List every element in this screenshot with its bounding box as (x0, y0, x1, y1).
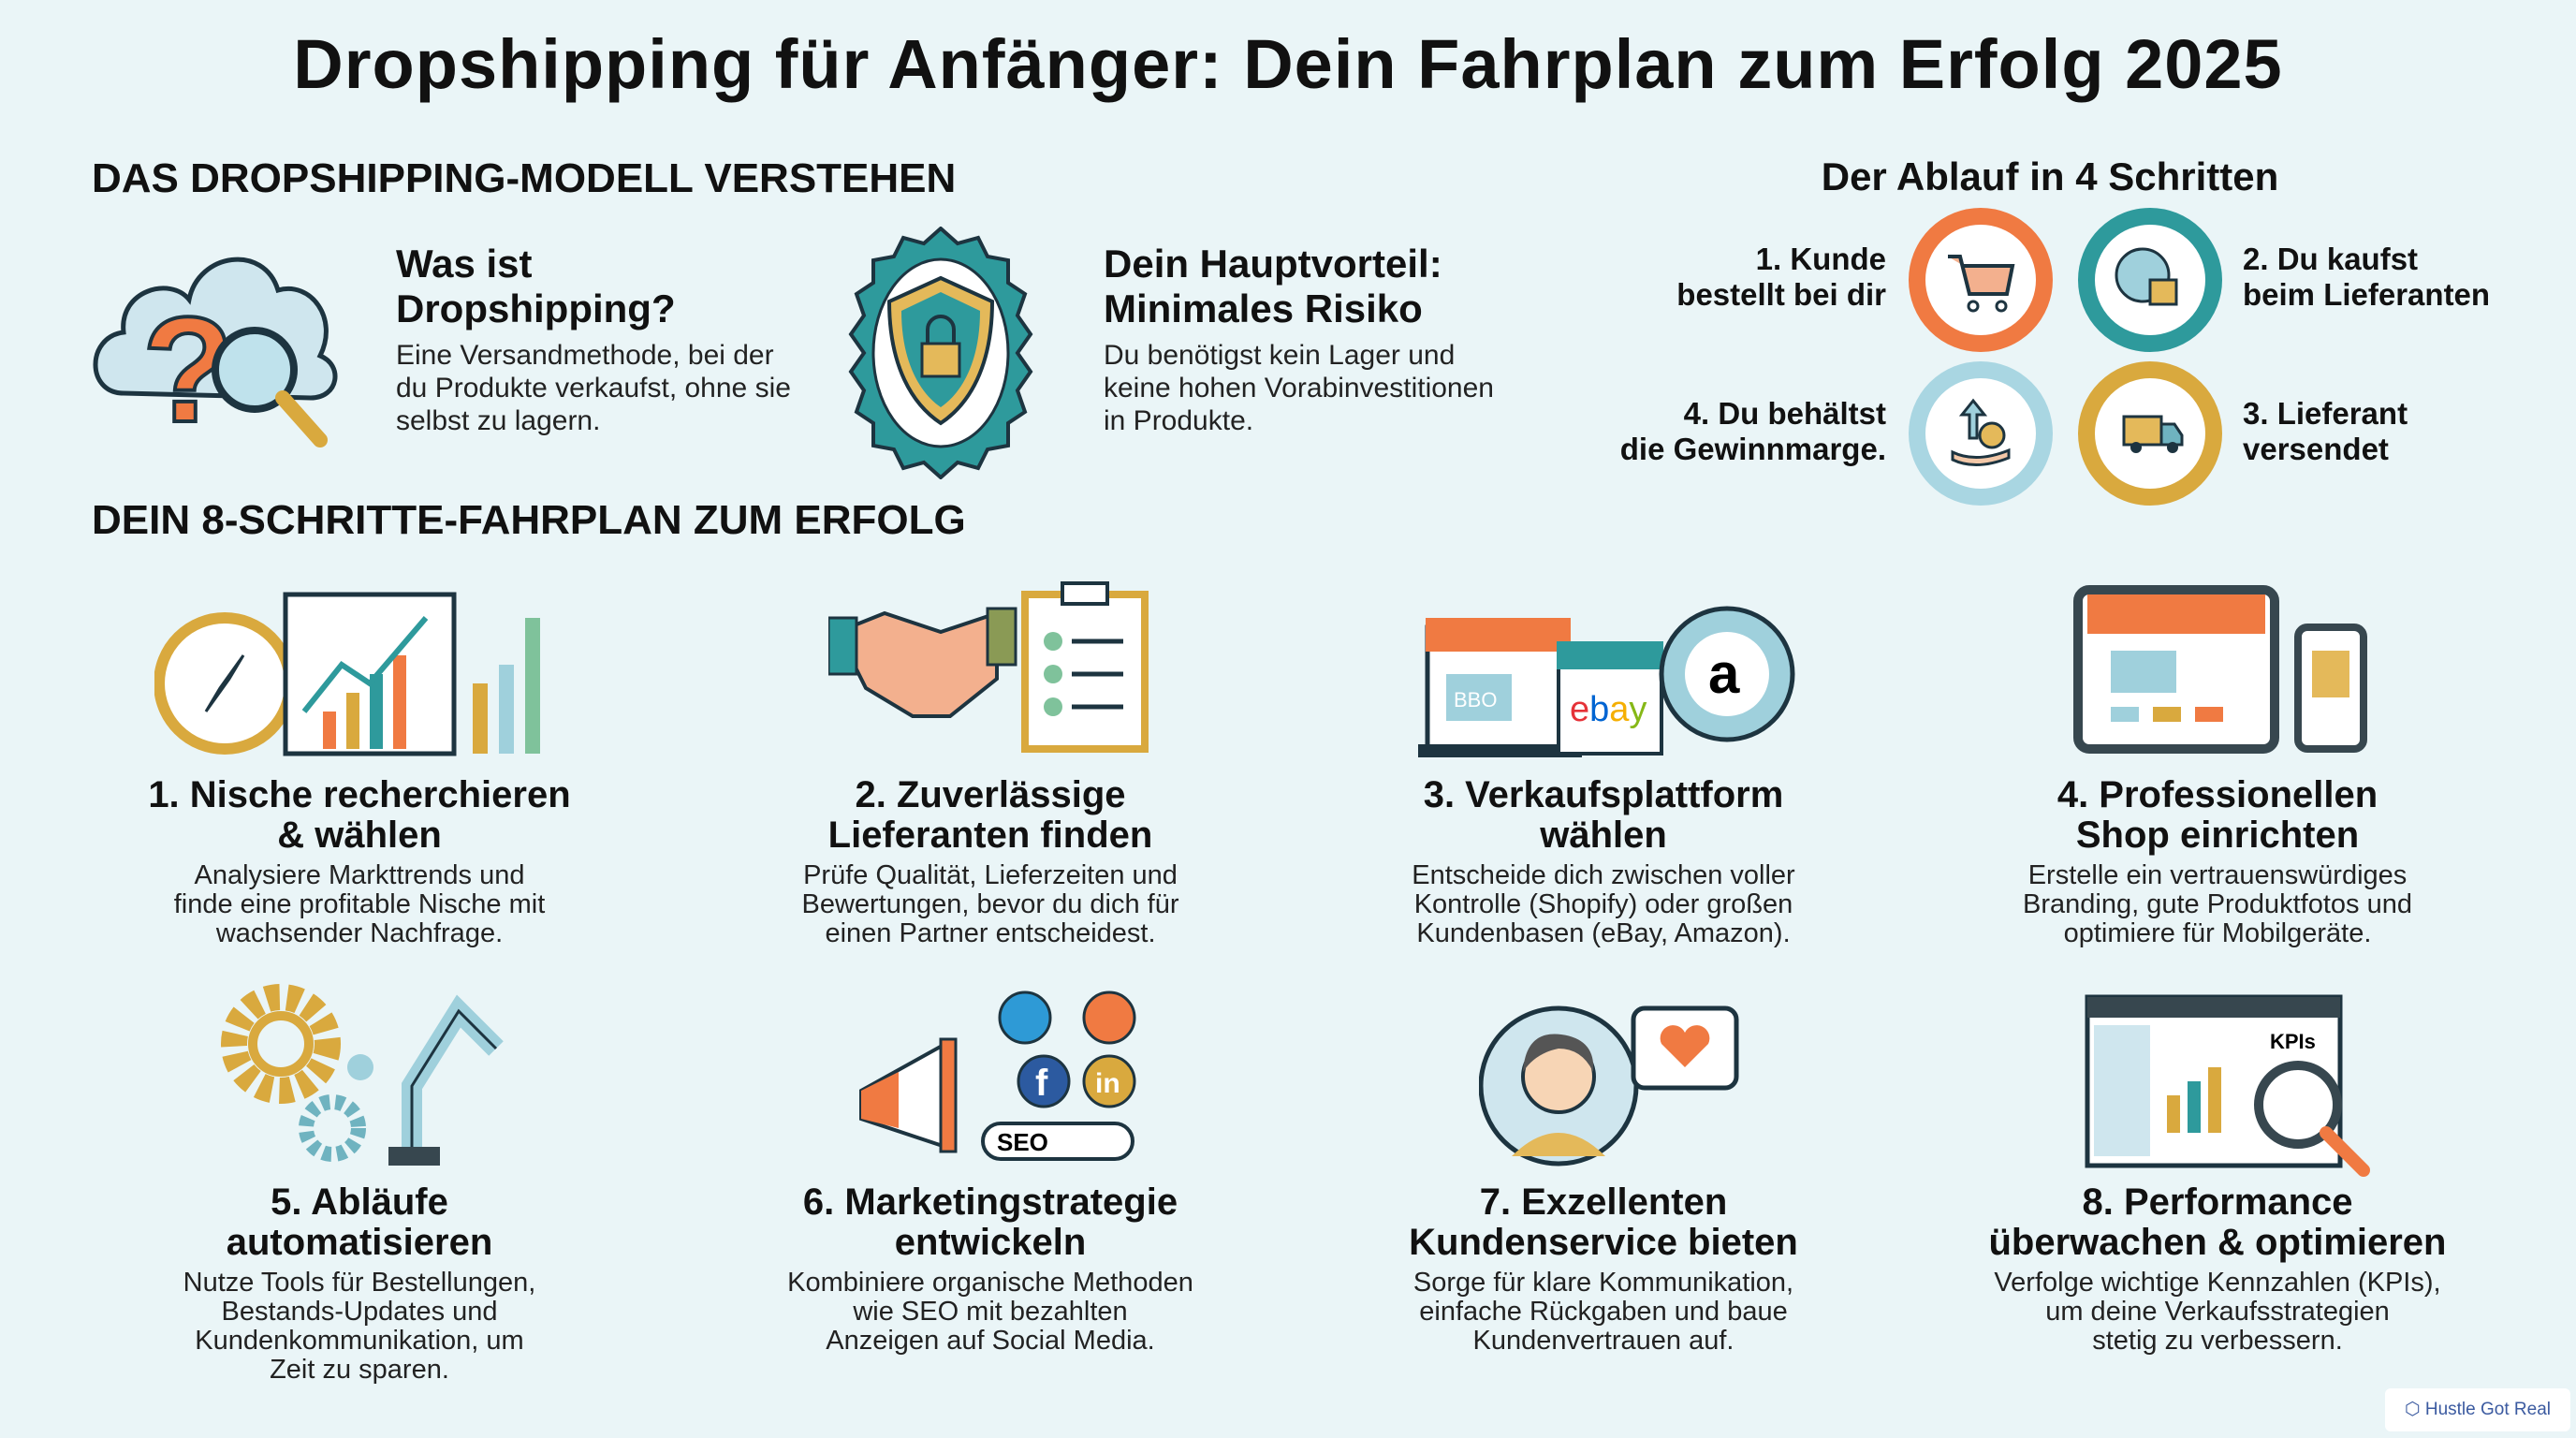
icon: compass and charts (154, 592, 540, 756)
label: step 2: 2. Du kaufst (2243, 242, 2418, 276)
icon: sales platforms: BBO (1454, 688, 1497, 712)
icon: dashboard with KPIs: KPIs (2270, 1030, 2316, 1053)
text block: main advantage: Dein Hauptvorteil: (1104, 242, 1442, 286)
icon: sales platforms: ebay (1570, 690, 1647, 729)
step 6: Kombiniere organische Methoden (787, 1268, 1193, 1298)
label: step 4 (1620, 396, 1886, 466)
icon: megaphone and social: f (1035, 1063, 1048, 1104)
step 5: Kundenkommunikation, um (195, 1326, 524, 1356)
icon: cloud with question mark and magnifier (94, 257, 338, 449)
text block: what is dropshipping: Dropshipping? (396, 286, 676, 330)
icon: shield badge (848, 227, 1033, 479)
step 7: Kundenservice bieten (1409, 1222, 1798, 1263)
step 6: wie SEO mit bezahlten (853, 1297, 1128, 1327)
step 1: 1. Nische recherchieren (148, 774, 571, 815)
heading: 4 steps: Der Ablauf in 4 Schritten (1822, 154, 2278, 198)
step 8: überwachen & optimieren (1988, 1222, 2446, 1263)
step 8: Verfolge wichtige Kennzahlen (KPIs), (1994, 1268, 2441, 1298)
step 2: Bewertungen, bevor du dich für (801, 889, 1179, 919)
icon: handshake and checklist (828, 581, 1149, 753)
label: step 4: 4. Du behältst (1684, 396, 1886, 431)
step 7: einfache Rückgaben und baue (1419, 1297, 1788, 1327)
step 4 (2023, 774, 2412, 948)
step 6: 6. Marketingstrategie (803, 1181, 1178, 1223)
label: step 1: 1. Kunde (1756, 242, 1886, 276)
label: step 1: bestellt bei dir (1676, 277, 1886, 312)
circle: step 1 cart (1909, 208, 2053, 352)
text block: what is dropshipping (396, 242, 791, 436)
step 5: Zeit zu sparen. (270, 1355, 449, 1385)
icon: customer service person (1479, 1005, 1739, 1167)
step 6: entwickeln (895, 1222, 1086, 1263)
step 5: 5. Abläufe (271, 1181, 448, 1223)
step 6 (787, 1181, 1193, 1356)
circle: step 3 truck (2078, 361, 2222, 506)
step 1 (148, 774, 571, 948)
step 4: 4. Professionellen (2057, 774, 2378, 815)
icon: cloud with question mark and magnifier: ? (142, 286, 234, 449)
step 5: automatisieren (227, 1222, 492, 1263)
text block: what is dropshipping: du Produkte verkaufst, ohne sie (396, 373, 791, 404)
step 1: & wählen (277, 814, 442, 856)
step 3: Kontrolle (Shopify) oder großen (1414, 889, 1793, 919)
icon: shop on tablet and phone (2073, 585, 2367, 754)
step 4: optimiere für Mobilgeräte. (2064, 918, 2371, 948)
step 6: Anzeigen auf Social Media. (826, 1326, 1155, 1356)
step 3: 3. Verkaufsplattform (1424, 774, 1783, 815)
section heading: 8 steps: DEIN 8-SCHRITTE-FAHRPLAN ZUM ERFOLG (92, 497, 966, 543)
icon: megaphone and social (859, 990, 1136, 1161)
label: step 3: 3. Lieferant (2243, 396, 2408, 431)
step 8: 8. Performance (2082, 1181, 2353, 1223)
step 5 (183, 1181, 535, 1385)
title: Dropshipping für Anfänger: Dein Fahrplan zum Erfolg 2025 (293, 25, 2283, 103)
icon: sales platforms: a (1708, 642, 1740, 705)
step 8: um deine Verkaufsstrategien (2045, 1297, 2390, 1327)
label: step 2 (2243, 242, 2490, 312)
icon: megaphone and social: in (1095, 1068, 1120, 1099)
step 4: Shop einrichten (2076, 814, 2359, 856)
step 1: finde eine profitable Nische mit (174, 889, 545, 919)
step 4: Erstelle ein vertrauenswürdiges (2028, 860, 2407, 890)
label: step 2: beim Lieferanten (2243, 277, 2490, 312)
step 7 (1409, 1181, 1798, 1356)
step 3: wählen (1540, 814, 1667, 856)
circle: step 4 money (1909, 361, 2053, 506)
icon: megaphone and social: SEO (997, 1128, 1048, 1156)
step 2: einen Partner entscheidest. (825, 918, 1156, 948)
label: step 3 (2243, 396, 2408, 466)
step 3 (1412, 774, 1795, 948)
text block: main advantage: Minimales Risiko (1104, 286, 1423, 330)
step 7: Kundenvertrauen auf. (1473, 1326, 1734, 1356)
step 2: Prüfe Qualität, Lieferzeiten und (803, 860, 1178, 890)
step 8 (1988, 1181, 2446, 1356)
watermark (2385, 1388, 2570, 1431)
step 4: Branding, gute Produktfotos und (2023, 889, 2412, 919)
text block: what is dropshipping: Was ist (396, 242, 532, 286)
step 2: 2. Zuverlässige (855, 774, 1126, 815)
text block: what is dropshipping: selbst zu lagern. (396, 405, 600, 436)
step 1: Analysiere Markttrends und (195, 860, 524, 890)
label: step 1 (1676, 242, 1886, 312)
step 3: Entscheide dich zwischen voller (1412, 860, 1795, 890)
text block: main advantage (1104, 242, 1494, 436)
icon: gears and robot arm (221, 984, 504, 1166)
step 8: stetig zu verbessern. (2092, 1326, 2343, 1356)
text block: main advantage: Du benötigst kein Lager und (1104, 340, 1455, 371)
icon: dashboard with KPIs (2086, 994, 2370, 1177)
text block: main advantage: in Produkte. (1104, 405, 1253, 436)
step 7: 7. Exzellenten (1480, 1181, 1727, 1223)
circle: step 2 globe (2078, 208, 2222, 352)
text block: main advantage: keine hohen Vorabinvestitionen (1104, 373, 1494, 404)
label: step 4: die Gewinnmarge. (1620, 432, 1886, 466)
step 2: Lieferanten finden (828, 814, 1152, 856)
text block: what is dropshipping: Eine Versandmethode, bei der (396, 340, 774, 371)
step 5: Bestands-Updates und (221, 1297, 498, 1327)
step 3: Kundenbasen (eBay, Amazon). (1416, 918, 1791, 948)
step 1: wachsender Nachfrage. (216, 918, 503, 948)
step 2 (801, 774, 1179, 948)
watermark: ⬡ Hustle Got Real (2405, 1400, 2551, 1419)
step 5: Nutze Tools für Bestellungen, (183, 1268, 535, 1298)
section heading: model: DAS DROPSHIPPING-MODELL VERSTEHEN (92, 155, 956, 201)
label: step 3: versendet (2243, 432, 2389, 466)
icon: sales platforms (1418, 607, 1795, 757)
step 7: Sorge für klare Kommunikation, (1413, 1268, 1793, 1298)
